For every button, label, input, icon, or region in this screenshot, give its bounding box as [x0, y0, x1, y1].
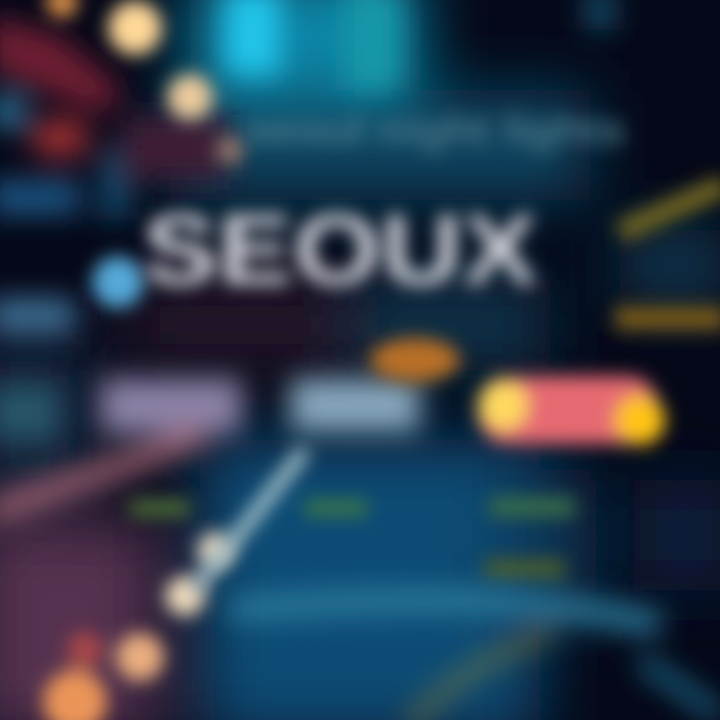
- left side bands: [0, 0, 615, 440]
- light streak: [195, 450, 305, 590]
- title: SEOUX: [142, 194, 538, 306]
- lower panels: [0, 378, 420, 525]
- bokeh lights: [43, 0, 244, 720]
- subtitle: seoul night lights: [245, 106, 625, 153]
- right stripes: [615, 185, 720, 330]
- car: [370, 338, 665, 445]
- green labels: [130, 498, 575, 578]
- bottom curves: [230, 601, 720, 720]
